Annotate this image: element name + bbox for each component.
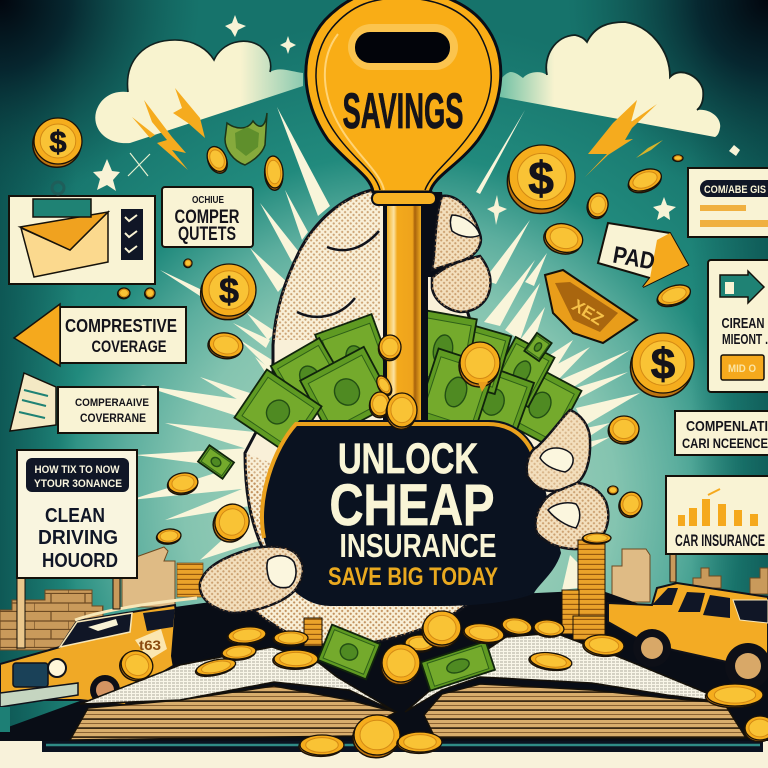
title: unlock: UNLOCK [338, 435, 478, 483]
panel: compare quotes: QUTETS [178, 224, 236, 245]
large dollar coin: top right [507, 145, 575, 213]
panel: coverage note with open book [10, 373, 158, 433]
money fan [234, 310, 582, 454]
floating bill top right of hand [524, 333, 552, 361]
arrow panel: comprehensive coverage: COVERAGE [92, 337, 166, 356]
panel: envelope clipboard [9, 182, 155, 284]
signboard: clean driving record: CLEAN [45, 505, 105, 527]
signboard: clean driving record: DRIVING [38, 527, 118, 549]
key: head, collar and shaft [306, 0, 501, 425]
right curled fingers above wallet [428, 192, 491, 312]
panel: compare quotes [162, 187, 253, 247]
arrow panel: pad [598, 223, 688, 287]
panel: coverage note with open book: COMPERAAIVE [75, 397, 149, 409]
black floor shadow [0, 590, 768, 742]
thumb [200, 547, 303, 613]
fingernail [450, 215, 480, 237]
panel: compare card [688, 168, 768, 237]
signboard: clean driving record [17, 450, 137, 648]
icon: lightning bolt right [585, 100, 657, 177]
sunburst rays [130, 107, 640, 590]
gold tag badge [545, 270, 637, 343]
large dollar coin: mid right [630, 333, 694, 397]
signboard: clean driving record: YTOUR 3ONANCE [34, 478, 122, 490]
floating bill left [198, 445, 234, 479]
cloud: left [95, 40, 303, 143]
icon: green shield [225, 113, 267, 165]
scenery: left wall and buildings [0, 547, 203, 650]
tagline: save big today: SAVE BIG TODAY [328, 563, 498, 591]
coins and bills on book [116, 611, 768, 758]
cars: right yellow [608, 583, 768, 689]
wallet [262, 421, 560, 605]
title: cheap: CHEAP [330, 473, 494, 538]
panel: clean mileage card: MID O [728, 363, 756, 375]
panel: clean mileage card [708, 260, 768, 392]
finger creases [297, 231, 379, 317]
arrow panel: comprehensive coverage [14, 304, 186, 366]
panel: compare quotes: COMPER [174, 207, 240, 228]
gold tag badge: XEZ [569, 296, 607, 329]
open book [42, 633, 763, 752]
large dollar coin: mid left [201, 264, 256, 320]
panel: compare quotes: OCHIUE [192, 195, 224, 206]
panel: car insurance bar chart [666, 476, 768, 582]
cloud left outline [128, 40, 271, 92]
large dollar coin: mid left: $ [219, 270, 239, 311]
signboard: clean driving record: HOUORD [42, 550, 118, 572]
scattered small coins [118, 143, 693, 547]
signboard: clean driving record: HOW TIX TO NOW [34, 464, 120, 476]
coin stacks [304, 533, 611, 646]
label: car number: t63 [139, 637, 161, 653]
scenery: right buildings and bricks [612, 549, 768, 602]
coins on key [370, 335, 500, 429]
icon: sparkle cross [128, 153, 150, 176]
label: savings: SAVINGS [342, 83, 464, 139]
icon: stars [93, 15, 740, 225]
large dollar coin: top right: $ [528, 152, 554, 204]
arrow panel: pad: PAD [611, 242, 657, 275]
large dollar coin: mid right: $ [651, 340, 675, 389]
large dollar coin: top left [33, 118, 82, 167]
cars: left yellow [0, 598, 225, 732]
panel: coverage note with open book: COVERRANE [80, 411, 146, 425]
arrow panel: comprehensive coverage: COMPRESTIVE [65, 316, 177, 336]
large dollar coin: top left: $ [49, 124, 67, 159]
title: insurance: INSURANCE [340, 527, 496, 564]
bottom cream strip [0, 741, 768, 768]
cloud: right [499, 22, 720, 137]
icon: lightning bolt left [132, 88, 205, 170]
hand holding wallet [245, 190, 570, 646]
panel: compensation card [675, 411, 768, 455]
icon: small bolt right [636, 140, 663, 158]
right fingers [527, 410, 608, 549]
cloud right outline [546, 22, 703, 110]
